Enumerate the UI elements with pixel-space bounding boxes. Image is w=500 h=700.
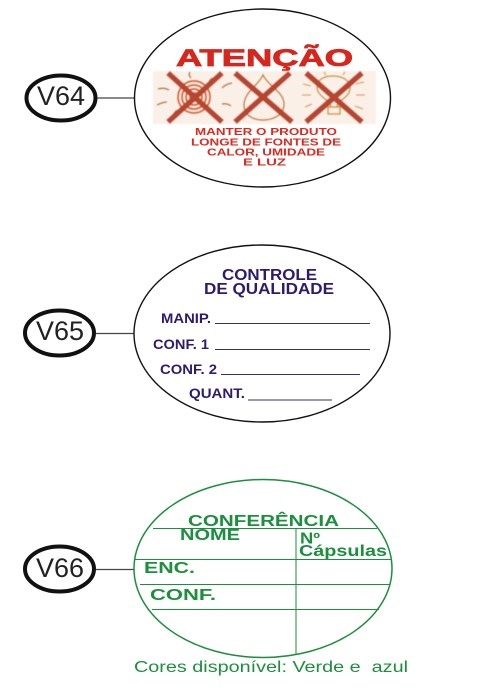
- table text: CONF.: [150, 587, 216, 604]
- heading: controle de qualidade: DE QUALIDADE: [204, 281, 334, 298]
- badge: V64: V64: [37, 81, 85, 111]
- heading: controle de qualidade: CONTROLE: [222, 267, 317, 284]
- badge: V64: [26, 76, 96, 120]
- icon: humidity drop crossed out: [235, 73, 292, 122]
- warning icon strip: [153, 71, 376, 124]
- table grid: [135, 528, 392, 654]
- warning text: [191, 126, 341, 168]
- table text: CONFERÊNCIA: [188, 512, 339, 530]
- form fields: CONF. 2: [160, 361, 217, 377]
- connector: V64: [97, 97, 135, 99]
- connector: V66: [96, 568, 134, 570]
- table text: Cápsulas: [299, 543, 387, 560]
- warning text: MANTER O PRODUTO: [195, 126, 337, 138]
- badge: V65: [25, 310, 94, 356]
- panel: V65 quality control label: [25, 245, 390, 422]
- icon: heat source crossed out: [157, 72, 232, 122]
- connector: V65: [96, 332, 134, 334]
- icon: light bulb crossed out: [302, 72, 365, 122]
- warning text: LONGE DE FONTES DE: [191, 136, 341, 148]
- table text: ENC.: [144, 560, 195, 577]
- label outline: V66: [134, 480, 392, 658]
- form fields: CONF. 1: [153, 336, 209, 352]
- heading: ATENÇÃO: ATENÇÃO: [176, 44, 353, 72]
- label outline: V64: [134, 9, 390, 187]
- badge: V66: [25, 546, 94, 592]
- label outline: V65: [134, 245, 390, 422]
- badge: V66: V66: [36, 553, 84, 583]
- panel: V64 warning label: [26, 9, 390, 187]
- form fields: QUANT.: [189, 385, 245, 401]
- caption: available colours: Cores disponível: Verde e azul: [134, 659, 408, 676]
- form fields: MANIP.: [161, 310, 211, 326]
- table text: Nº: [300, 530, 320, 548]
- badge: V65: V65: [36, 316, 84, 346]
- warning text: CALOR, UMIDADE: [207, 146, 325, 158]
- table text: [144, 512, 387, 604]
- table text: NOME: [180, 527, 240, 544]
- panel: V66 conference label: [25, 480, 408, 676]
- heading: controle de qualidade: [204, 267, 334, 298]
- form fields: [153, 310, 370, 401]
- warning text: E LUZ: [243, 156, 287, 168]
